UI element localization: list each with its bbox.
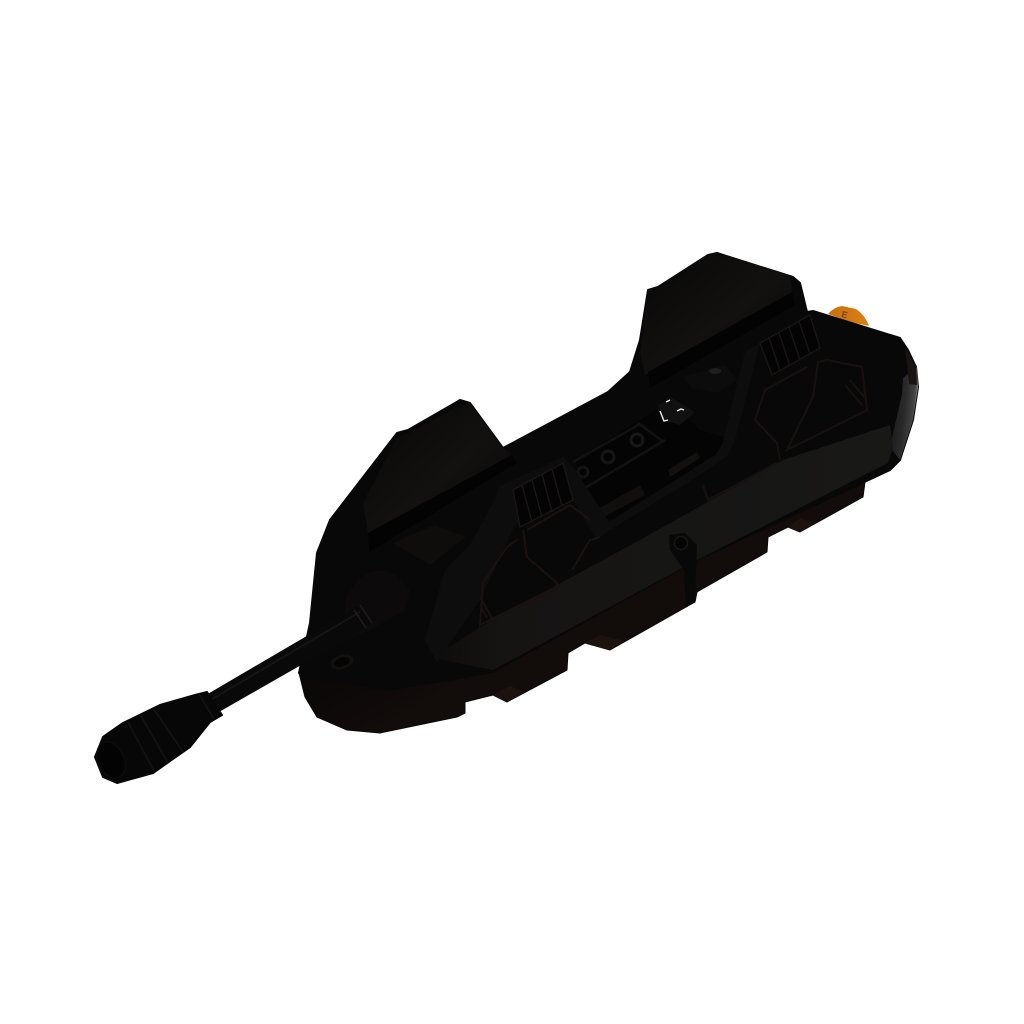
- orange knob: E: [841, 309, 849, 320]
- orange knob: [828, 306, 869, 326]
- recess clip right: [668, 452, 700, 477]
- cable strain rings: [354, 605, 372, 628]
- connector tip: [91, 737, 131, 783]
- connector ribs: [128, 694, 214, 771]
- recess ribs: [573, 423, 665, 488]
- right cradle slot: [648, 292, 795, 388]
- left vents: [513, 463, 573, 527]
- left hexagon panel lines: [480, 505, 600, 625]
- recess ring 2: [602, 451, 614, 463]
- base bump highlights: [493, 518, 815, 702]
- side rim strip: [433, 425, 893, 670]
- glossy right end cap: [890, 367, 918, 460]
- switch with white brackets: [658, 398, 695, 425]
- right tab dimple: [709, 368, 721, 374]
- cable: [206, 605, 372, 712]
- mounting hole: [328, 652, 356, 672]
- right vents: [760, 315, 820, 375]
- right arm: [597, 343, 760, 530]
- recess clip left: [600, 485, 645, 517]
- right tab: [683, 365, 737, 393]
- cable gland: [345, 571, 410, 640]
- rim screw hole: [669, 533, 697, 607]
- end cap recess: [905, 347, 917, 385]
- left cradle slot: [368, 455, 517, 552]
- right cradle: [640, 253, 795, 388]
- left arm: [425, 457, 613, 662]
- left tab: [393, 525, 465, 565]
- left cradle: [363, 403, 517, 552]
- right hexagon panel lines: [703, 360, 867, 500]
- central recess: [573, 400, 735, 525]
- recess ring 1: [631, 434, 643, 446]
- lower base plate: [299, 440, 890, 733]
- recess ring 3: [578, 467, 588, 477]
- connector plug: [91, 692, 222, 783]
- main housing silhouette: [299, 253, 918, 690]
